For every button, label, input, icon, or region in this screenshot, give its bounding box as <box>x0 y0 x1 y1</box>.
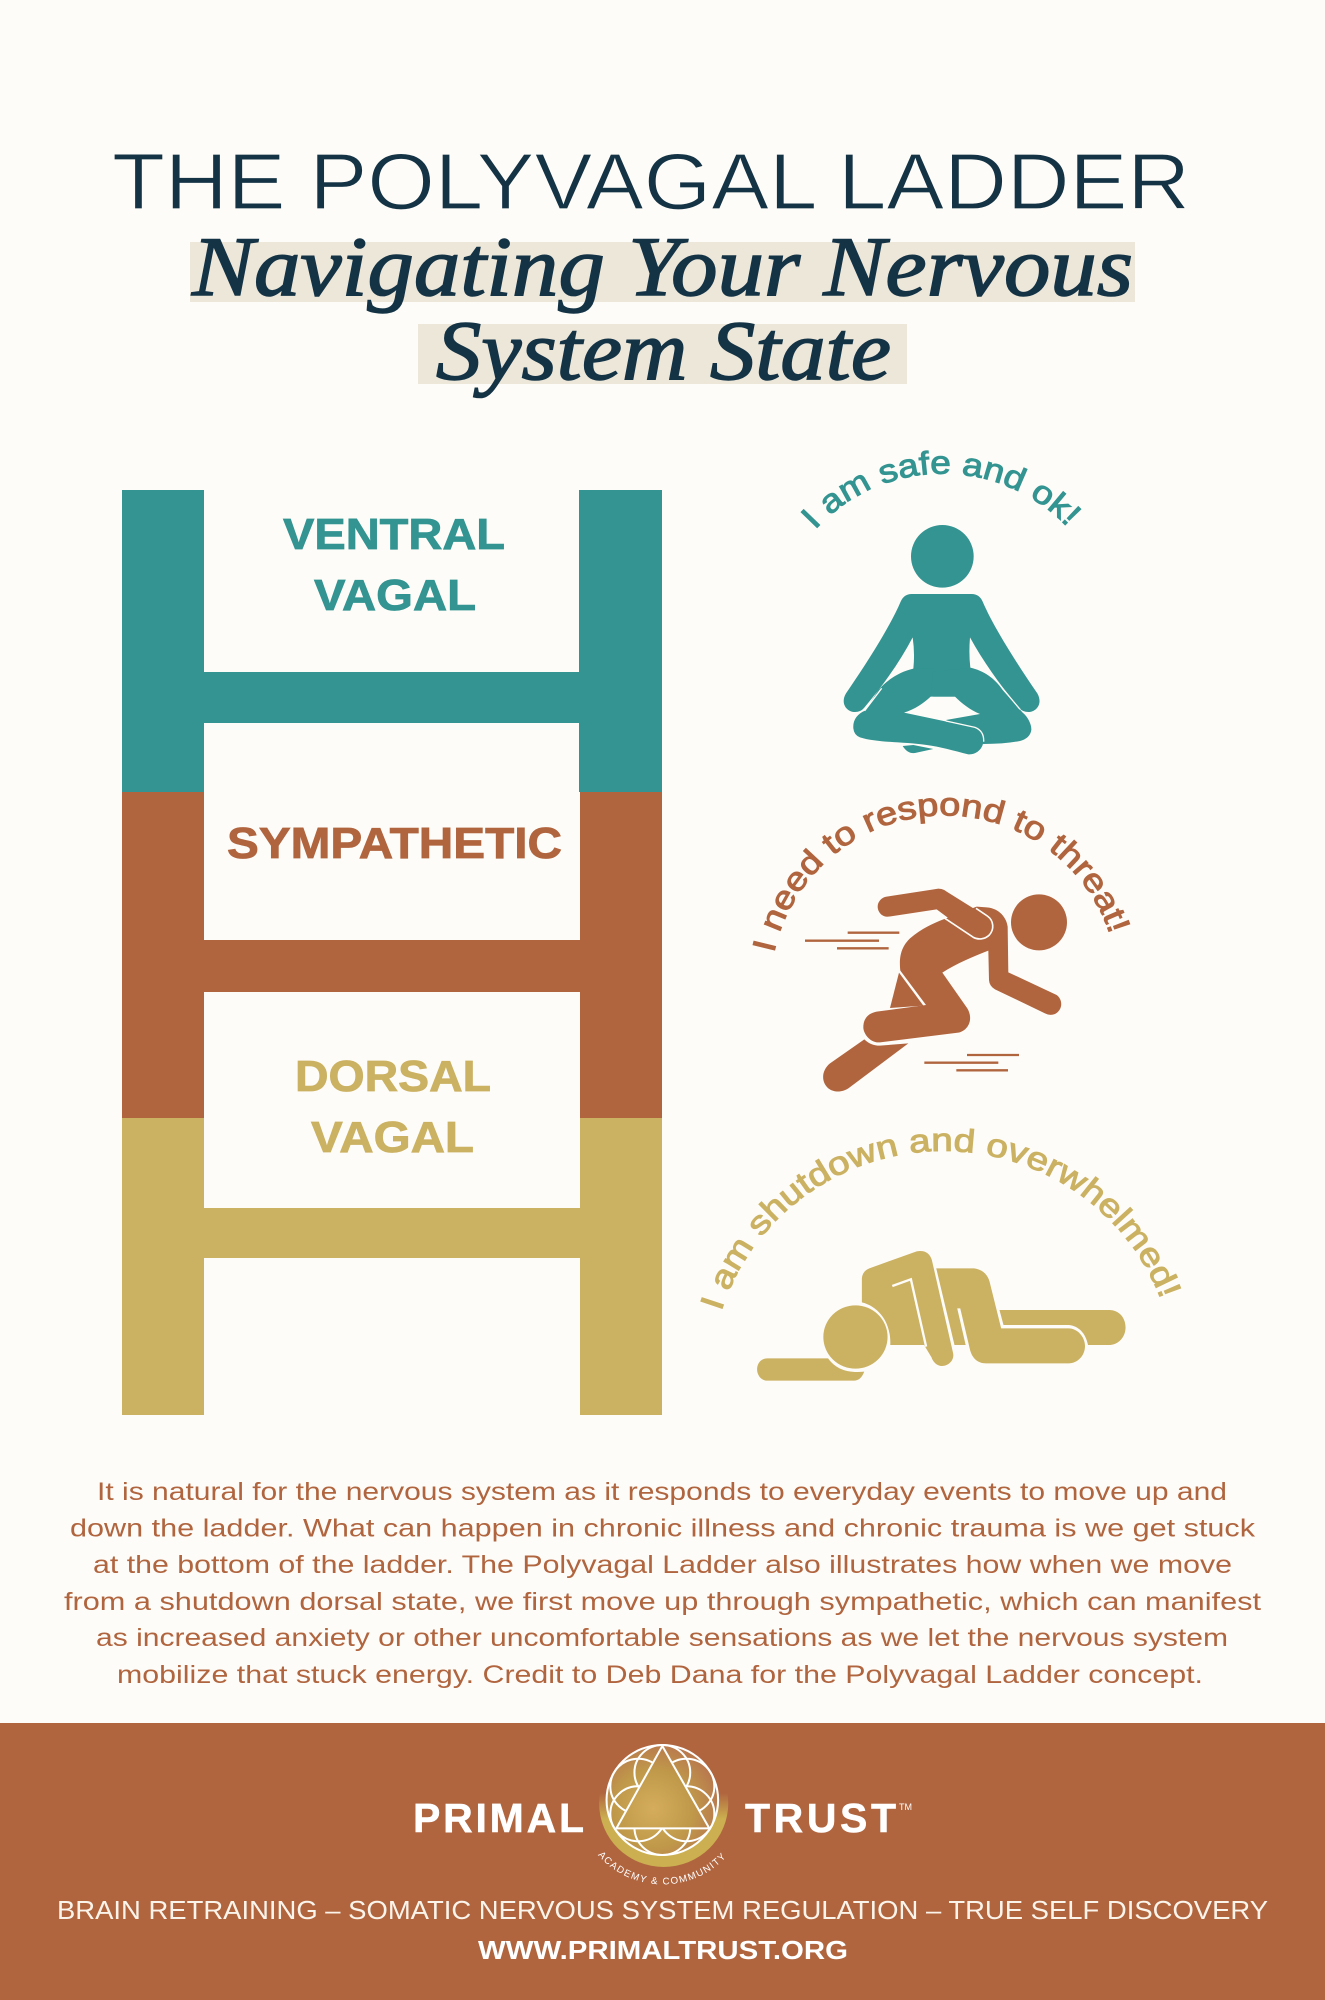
hip and front leg <box>936 1268 1085 1363</box>
raised arm <box>878 889 992 938</box>
body text: as increased anxiety or other uncomfortable sensations as we let the nervous system <box>96 1624 1228 1652</box>
footer tagline: BRAIN RETRAINING – SOMATIC NERVOUS SYSTEM REGULATION – TRUE SELF DISCOVERY <box>57 1895 1268 1925</box>
wordmark: Trust: TRUST <box>745 1795 896 1841</box>
rear thigh shape <box>890 973 923 1008</box>
website url: WWW.PRIMALTRUST.ORG <box>478 1935 848 1965</box>
torso and arms <box>844 594 1040 712</box>
body text: mobilize that stuck energy. Credit to Deb Dana for the Polyvagal Ladder concept. <box>117 1661 1203 1689</box>
label: ventral vagal: VAGAL <box>314 571 476 620</box>
body text: It is natural for the nervous system as it responds to everyday events to move up and <box>97 1478 1227 1506</box>
body and front limbs <box>863 907 1061 1042</box>
label: dorsal vagal: VAGAL <box>311 1113 474 1162</box>
body text: down the ladder. What can happen in chronic illness and chronic trauma is we get stuck <box>70 1514 1256 1542</box>
head <box>911 525 974 588</box>
caption: threat: I need to respond to threat! <box>752 798 1130 951</box>
footer band <box>0 1723 1325 2000</box>
body text: from a shutdown dorsal state, we first move up through sympathetic, which can manifest <box>64 1588 1261 1616</box>
wordmark: Primal: PRIMAL <box>413 1795 584 1841</box>
label: dorsal vagal <box>295 1052 491 1162</box>
icon: collapsed figure with caption <box>700 1128 1182 1381</box>
rung: dorsal <box>204 1208 580 1258</box>
lower arm <box>757 1358 864 1381</box>
logo emblem <box>598 1744 728 1884</box>
rung: ventral <box>204 672 579 723</box>
label: dorsal vagal: DORSAL <box>295 1052 491 1101</box>
label: ventral vagal <box>283 510 505 620</box>
subtitle line 1: Navigating Your Nervous <box>191 220 1133 314</box>
subtitle line 2: System State <box>436 304 891 398</box>
ladder <box>122 490 662 1415</box>
body text: at the bottom of the ladder. The Polyvagal Ladder also illustrates how when we move <box>93 1551 1232 1579</box>
title <box>112 137 1190 398</box>
ladder rails: ventral section <box>122 490 662 792</box>
back leg <box>920 668 1031 744</box>
head <box>823 1305 888 1369</box>
ladder rails: dorsal section <box>122 1118 662 1415</box>
torso and arm <box>862 1251 953 1366</box>
title line: The Polyvagal Ladder: THE POLYVAGAL LADDER <box>112 137 1190 226</box>
speed lines <box>805 933 1019 1070</box>
label: sympathetic: SYMPATHETIC <box>227 819 562 868</box>
icon: meditating figure with caption <box>800 450 1082 754</box>
rung: sympathetic <box>204 940 580 992</box>
logo: Primal Trust <box>413 1744 912 1884</box>
head <box>1011 894 1067 950</box>
rear lower leg <box>823 1039 908 1091</box>
back leg <box>999 1310 1126 1345</box>
caption: shutdown: I am shutdown and overwhelmed! <box>700 1128 1182 1309</box>
ladder rails: sympathetic section <box>122 792 662 1118</box>
label: ventral vagal: VENTRAL <box>283 510 505 559</box>
logo tagline: ACADEMY & COMMUNITY <box>598 1852 724 1884</box>
body text <box>64 1478 1261 1689</box>
subtitle highlight line 1 <box>190 242 1135 302</box>
front leg <box>853 669 983 754</box>
caption: safe: I am safe and ok! <box>800 450 1082 528</box>
foot <box>903 745 933 753</box>
subtitle highlight line 2 <box>418 324 907 384</box>
trademark: TM <box>899 1802 912 1812</box>
icon: sprinting figure with caption <box>752 798 1130 1092</box>
